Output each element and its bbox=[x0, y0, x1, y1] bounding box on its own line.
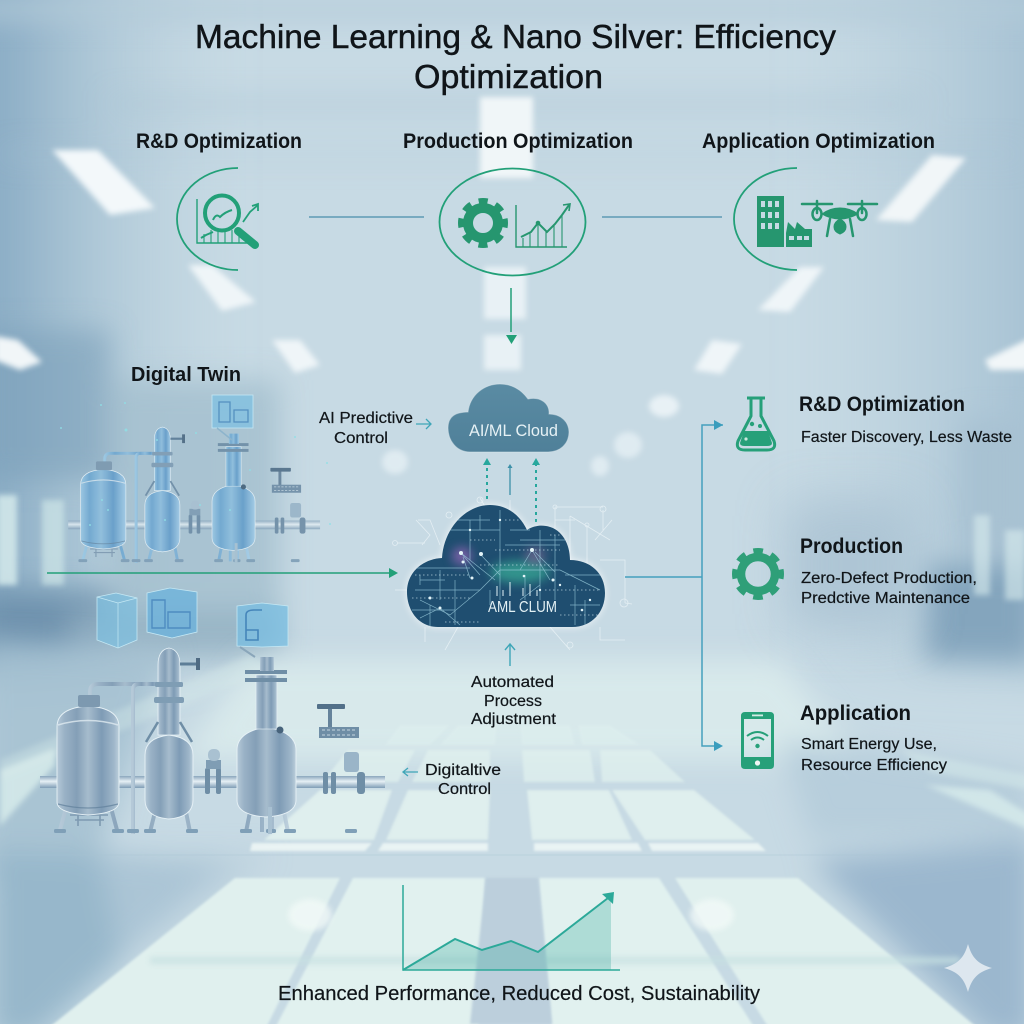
title: Optimization bbox=[414, 58, 603, 95]
floor panels bbox=[46, 725, 980, 1024]
top stage: Application Optimization bbox=[702, 130, 935, 270]
label: Automated Process Adjustment bbox=[471, 674, 557, 728]
label: Digitaltive Control: Control bbox=[438, 781, 491, 798]
connector: cloud to outcomes bbox=[625, 420, 723, 751]
outcome: Application: Smart Energy Use, bbox=[801, 736, 937, 753]
icon: drone bbox=[802, 201, 877, 236]
icon: flask bbox=[737, 398, 775, 450]
outcome: Application: Application bbox=[800, 702, 911, 725]
label: Automated Process Adjustment: Process bbox=[484, 693, 542, 710]
heading: Production Optimization: Production Optimization bbox=[403, 130, 633, 153]
arrow: adjustment up to cloud bbox=[505, 644, 515, 666]
chart: performance trend bbox=[403, 885, 620, 970]
icon: gear bbox=[461, 201, 505, 245]
arrow: production down to cloud bbox=[506, 288, 517, 344]
icon: sparkle mark bbox=[944, 944, 992, 992]
icon: gear bbox=[735, 551, 781, 597]
arc frame bbox=[734, 168, 797, 270]
arrow: plant data into cloud bbox=[47, 568, 398, 578]
cloud: AI/ML Cloud bbox=[448, 384, 569, 452]
connector: production to application bbox=[602, 216, 722, 218]
outcome: Production: Zero-Defect Production, bbox=[801, 570, 977, 587]
outcome: Production bbox=[735, 535, 977, 607]
arrow: digital control to plant bbox=[403, 768, 418, 776]
physical plant: steel tanks bbox=[40, 588, 385, 834]
label: AI Predictive Control bbox=[319, 410, 413, 447]
arrow: predictive control to cloud bbox=[416, 419, 431, 429]
outcome: R&D Optimization: R&D Optimization bbox=[799, 393, 965, 416]
top stage: Production Optimization bbox=[403, 130, 633, 276]
outcome: R&D Optimization bbox=[737, 393, 1012, 450]
heading: Application Optimization: Application Optimization bbox=[702, 130, 935, 153]
label: Automated Process Adjustment: Adjustment bbox=[471, 711, 557, 728]
cloud: AI/ML Cloud: AI/ML Cloud bbox=[469, 421, 558, 440]
floating data cubes bbox=[97, 588, 288, 657]
outcome: Production: Production bbox=[800, 535, 903, 558]
hologram cube bbox=[212, 395, 253, 440]
title: Machine Learning & Nano Silver: Efficiency bbox=[195, 18, 836, 55]
cloud: data network cloud bbox=[407, 505, 605, 627]
icon: building and factory bbox=[757, 196, 812, 247]
cloud: data network cloud: AML CLUM bbox=[488, 599, 557, 616]
top stage: R&D Optimization bbox=[136, 130, 302, 270]
icon: smartphone with wifi bbox=[741, 712, 774, 769]
label: Automated Process Adjustment: Automated bbox=[471, 674, 554, 691]
icon: rising chart bbox=[516, 204, 570, 247]
label: Digitaltive Control bbox=[425, 762, 501, 798]
digital twin plant: blue hologram bbox=[60, 395, 331, 563]
label: AI Predictive Control: Control bbox=[334, 430, 388, 447]
outcome: Application bbox=[741, 702, 947, 774]
upper floor glow and side wedges bbox=[0, 640, 1024, 1024]
label: Digitaltive Control: Digitaltive bbox=[425, 762, 501, 779]
outcome: R&D Optimization: Faster Discovery, Less Waste bbox=[801, 429, 1012, 446]
heading: R&D Optimization: R&D Optimization bbox=[136, 130, 302, 153]
outcome: Production: Predctive Maintenance bbox=[801, 590, 970, 607]
label: AI Predictive Control: AI Predictive bbox=[319, 410, 413, 427]
icon: magnifier over chart bbox=[177, 168, 258, 270]
caption: outcomes: Enhanced Performance, Reduced Cost, Sustainability bbox=[278, 983, 760, 1005]
title bbox=[195, 18, 836, 95]
outcome: Application: Resource Efficiency bbox=[801, 757, 947, 774]
arrows: data upward between clouds bbox=[483, 458, 540, 522]
circle frame bbox=[440, 168, 586, 276]
connector: R&D to production bbox=[309, 216, 424, 218]
network lines around big cloud bbox=[392, 497, 632, 650]
heading: Digital Twin: Digital Twin bbox=[131, 364, 241, 386]
